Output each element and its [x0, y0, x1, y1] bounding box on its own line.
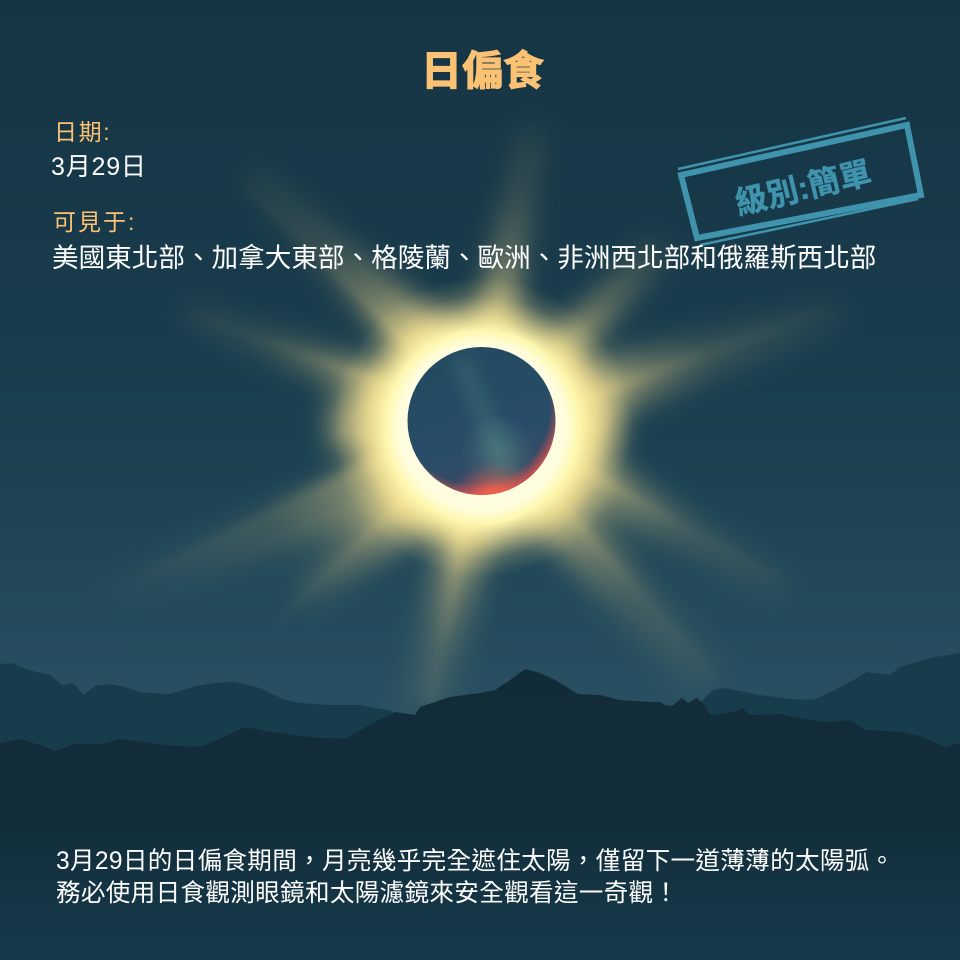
sun corona rays [90, 130, 845, 710]
visibility label: 可見于: [53, 209, 136, 235]
sun glow halo [332, 277, 632, 577]
description text: 3月29日的日偏食期間，月亮幾乎完全遮住太陽，僅留下一道薄薄的太陽弧。 [56, 848, 895, 875]
difficulty stamp [678, 118, 921, 245]
date value: 3月29日 [51, 153, 147, 181]
description text: 務必使用日食觀測眼鏡和太陽濾鏡來安全觀看這一奇觀！ [56, 880, 678, 907]
eclipse scene illustration [0, 116, 960, 830]
description text [56, 848, 895, 907]
date label: 日期: [54, 119, 111, 145]
far mountain range [0, 653, 960, 770]
title: 日偏食 [421, 48, 544, 94]
visibility regions: 美國東北部、加拿大東部、格陵蘭、歐洲、非洲西北部和俄羅斯西北部 [52, 243, 876, 273]
moon disc [408, 347, 556, 495]
near mountain range [0, 669, 960, 960]
stamp text: 級別:簡單 [732, 154, 875, 222]
